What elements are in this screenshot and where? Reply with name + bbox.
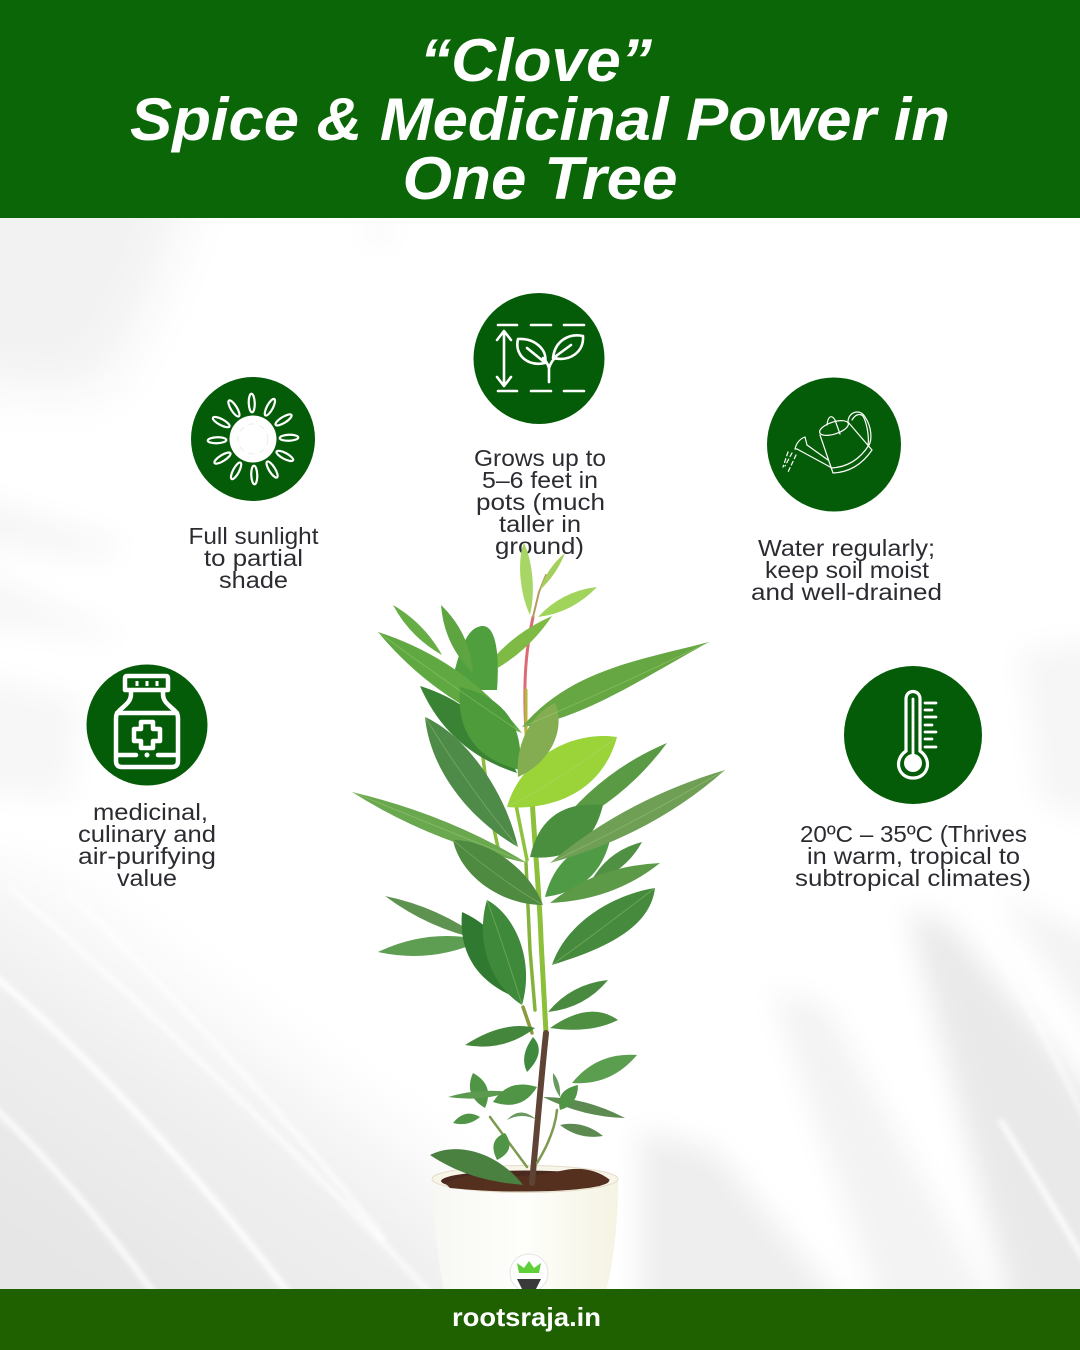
- header band: [0, 0, 1080, 218]
- text: value: medicinal,: [93, 799, 208, 825]
- text: watering: keep soil moist: [765, 557, 930, 583]
- text: value: [78, 799, 216, 891]
- icon: watering can: [767, 378, 901, 512]
- text: height: 5–6 feet in: [482, 467, 598, 493]
- text: height: ground): [495, 533, 584, 559]
- title: [130, 27, 950, 212]
- text: temperature: subtropical climates): [795, 865, 1031, 891]
- plant in pot: [352, 543, 725, 1295]
- icon: plant height: [474, 293, 604, 424]
- text: watering: Water regularly;: [758, 535, 935, 561]
- pot: [432, 1166, 618, 1295]
- text: height: pots (much: [476, 489, 605, 515]
- text: watering: [751, 535, 942, 605]
- text: value: value: [117, 865, 177, 891]
- text: height: Grows up to: [474, 445, 606, 471]
- icon: medicine bottle: [86, 664, 208, 786]
- text: sunlight: [188, 523, 319, 593]
- leaves: [352, 543, 725, 1185]
- icon: sun: [191, 377, 315, 501]
- stems: [483, 575, 557, 1183]
- title: Spice & Medicinal Power in: [130, 86, 950, 153]
- leaf midribs: [352, 632, 725, 1005]
- text: height: [474, 445, 606, 559]
- pot logo: [510, 1254, 548, 1292]
- website text: rootsraja.in: [452, 1302, 601, 1332]
- text: temperature: in warm, tropical to: [807, 843, 1020, 869]
- text: value: air-purifying: [78, 843, 216, 869]
- text: height: taller in: [499, 511, 581, 537]
- text: temperature: [795, 821, 1031, 891]
- text: sunlight: to partial: [204, 545, 303, 571]
- text: temperature: 20ºC – 35ºC (Thrives: [800, 821, 1027, 847]
- title: One Tree: [402, 145, 678, 212]
- text: watering: and well-drained: [751, 579, 942, 605]
- text: sunlight: Full sunlight: [188, 523, 319, 549]
- text: value: culinary and: [78, 821, 216, 847]
- text: sunlight: shade: [219, 567, 288, 593]
- footer band: [0, 1289, 1080, 1350]
- title: “Clove”: [420, 27, 652, 94]
- icon: thermometer: [844, 666, 982, 804]
